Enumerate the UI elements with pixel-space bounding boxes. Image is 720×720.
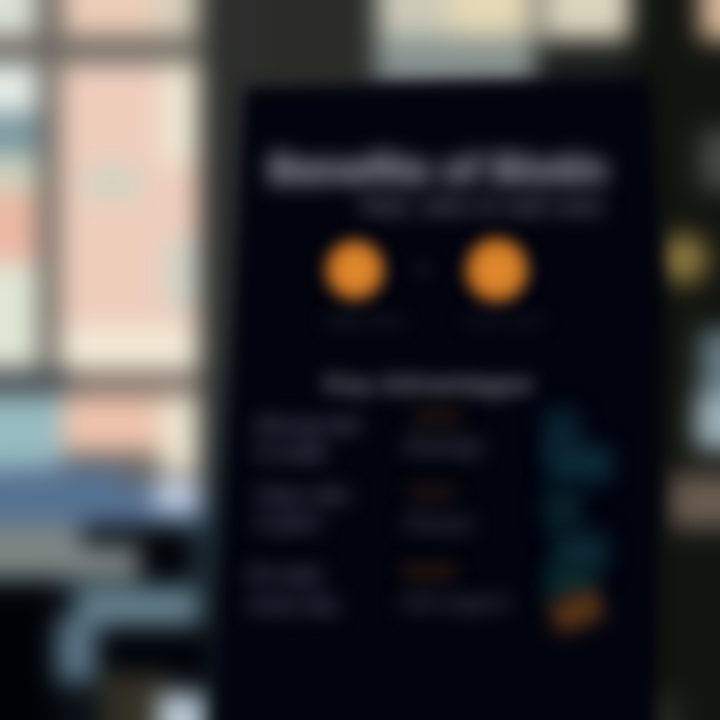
panel: dark infographic board xyxy=(205,70,673,720)
teal bar lower xyxy=(554,533,608,571)
benefit text 3 xyxy=(242,560,342,622)
label: left circle: Daily dose xyxy=(325,313,405,330)
blue hill xyxy=(0,440,210,530)
window pane: large pink xyxy=(60,64,198,370)
benefit text 6: Cell support xyxy=(400,593,511,614)
panel: right teal chart xyxy=(536,403,620,644)
accent mark 1 xyxy=(412,409,462,425)
teal bar base xyxy=(546,565,594,601)
window frame lower rail xyxy=(0,370,70,394)
benefit text 5: Focus xyxy=(405,510,473,536)
panel: left column benefits xyxy=(242,410,365,622)
window pane: lower xyxy=(0,396,62,476)
teal bar upper xyxy=(544,409,580,457)
benefit text 1 xyxy=(250,410,365,470)
benefit text 1: Strong hair xyxy=(255,415,362,437)
lower left objects xyxy=(0,525,210,595)
accent mark 2 xyxy=(408,485,456,501)
title: Benefits of Biotin xyxy=(268,146,607,192)
icon: orange accent xyxy=(548,587,606,635)
window pane: top left xyxy=(0,0,36,36)
plus sign between circles: + xyxy=(412,248,433,289)
accent mark 3 xyxy=(402,563,456,581)
benefit text 2: Clear skin xyxy=(255,485,351,507)
panel: middle column benefits xyxy=(399,404,511,618)
icon: left orange circle xyxy=(325,239,385,301)
top window panes xyxy=(265,0,375,110)
benefit text 2: & glow xyxy=(255,512,321,534)
window pane: left strip xyxy=(0,64,38,116)
dark pillar xyxy=(205,0,265,720)
label: right circle: Key result xyxy=(465,313,542,330)
panel: comparison icons xyxy=(314,226,542,330)
section heading: Key Advantages xyxy=(324,369,533,399)
subtitle: Hair, skin & nail care xyxy=(360,192,605,220)
benefit text 4: Energy xyxy=(405,432,483,458)
teal bar mid xyxy=(544,489,582,531)
teal bar wide xyxy=(548,445,612,483)
right foliage xyxy=(630,0,720,720)
benefit text 2 xyxy=(252,480,354,540)
benefit text 3: Fit nails xyxy=(247,565,323,587)
icon: right orange circle xyxy=(465,237,529,303)
benefit text 3: every day xyxy=(247,594,339,616)
right background lights xyxy=(660,234,708,284)
benefit text 1: & scalp xyxy=(255,442,326,464)
